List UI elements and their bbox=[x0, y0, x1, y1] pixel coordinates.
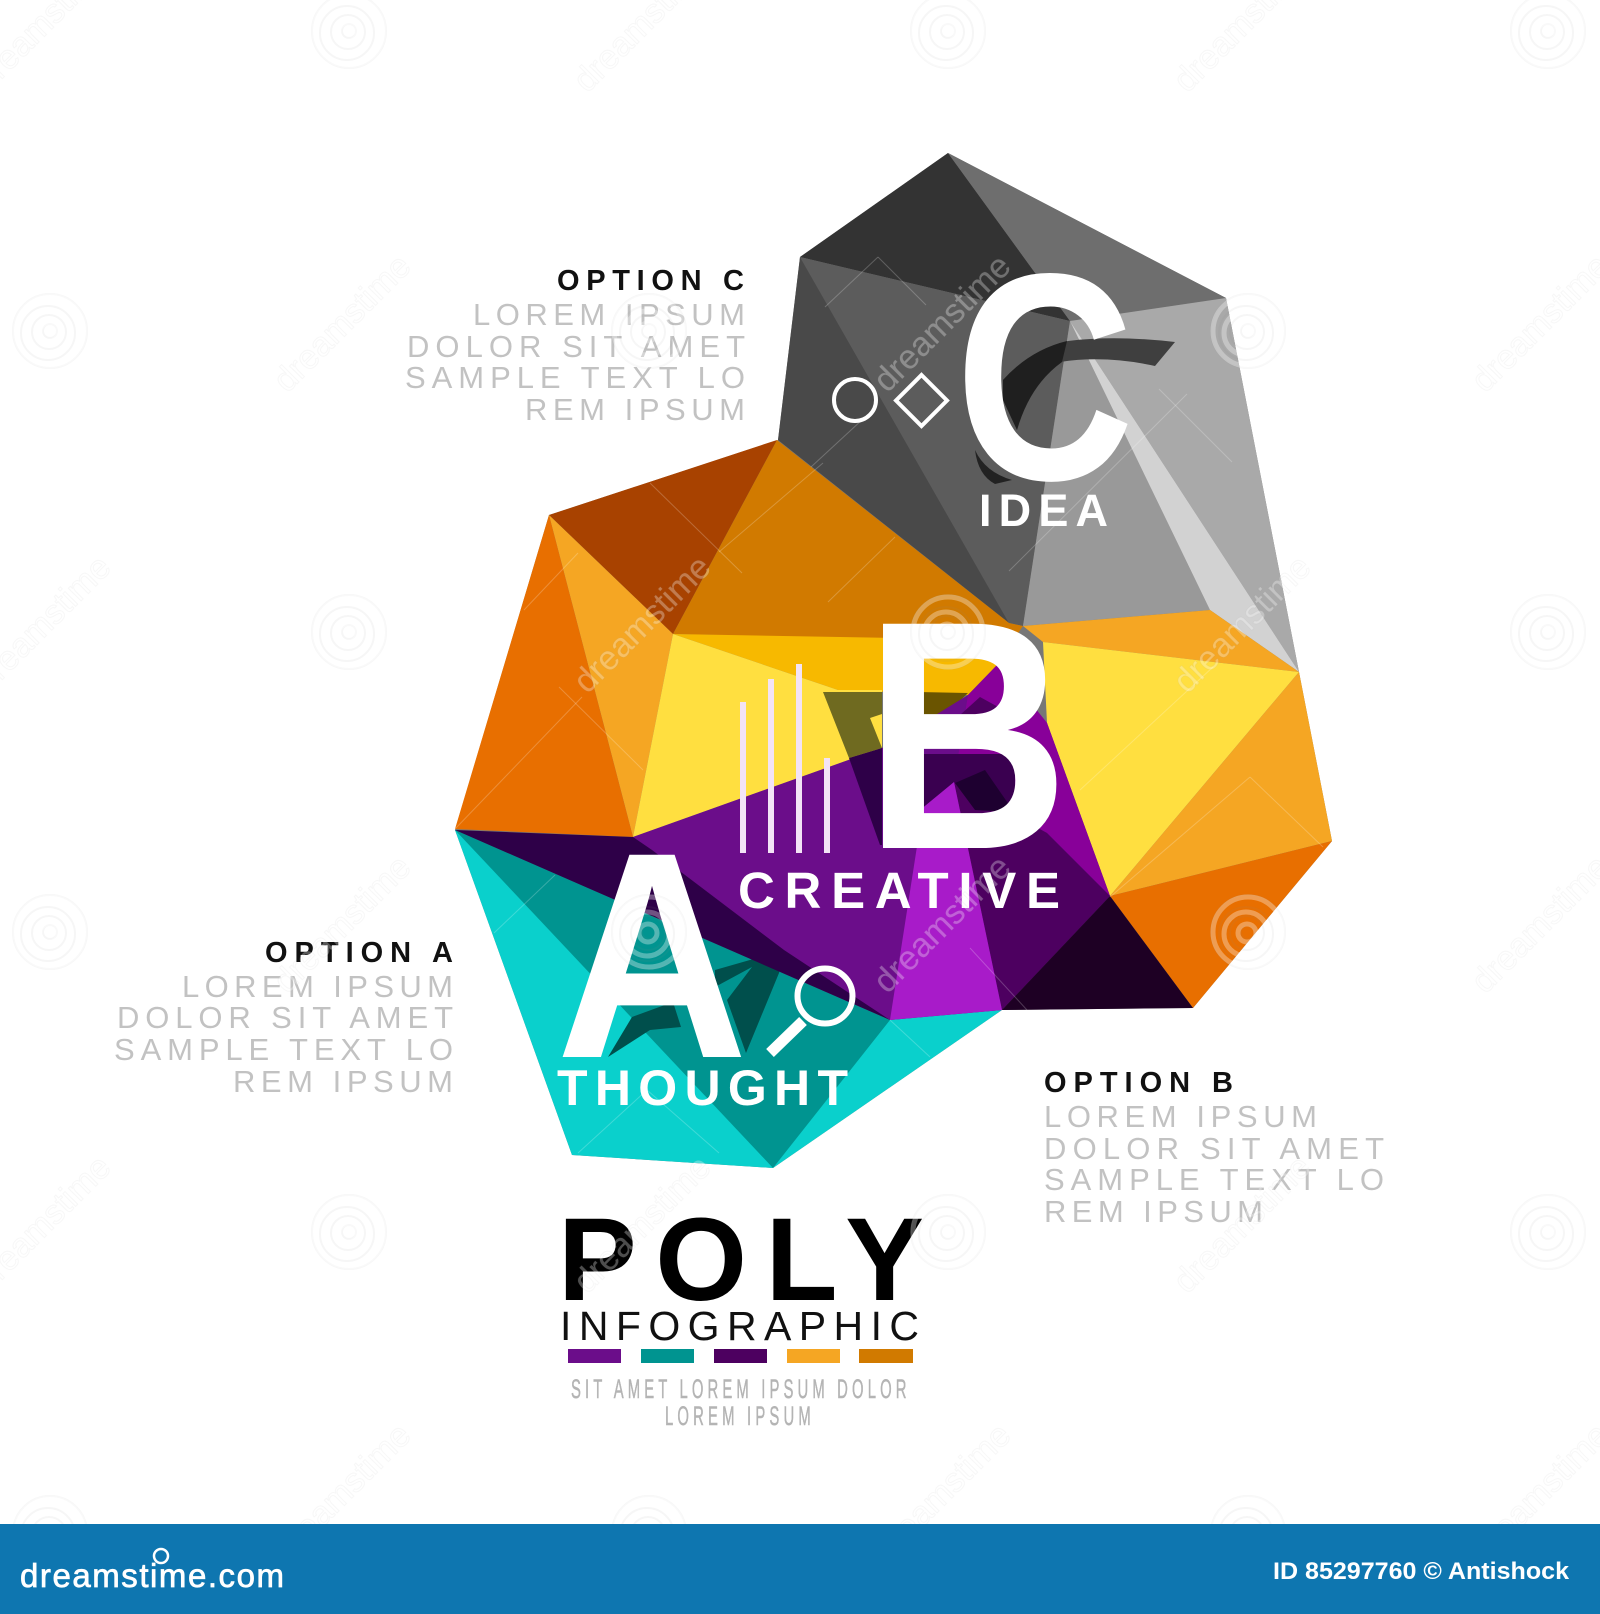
polygon: purple section bbox=[455, 663, 1193, 1020]
letter C: C bbox=[955, 212, 1134, 542]
icon: diamond bbox=[896, 375, 947, 426]
watermark pattern: dreamstime bbox=[566, 548, 718, 700]
icon: magnifier bbox=[770, 968, 852, 1053]
caption: LOREM IPSUM bbox=[665, 1400, 811, 1431]
footer logo: dreamstime.com bbox=[20, 1557, 284, 1594]
footer credit: ID 85297760 © Antishock bbox=[1273, 1558, 1570, 1585]
watermark pattern: dreamstime bbox=[266, 848, 418, 1000]
text block: option B: LOREM IPSUM bbox=[1044, 1099, 1317, 1134]
watermark pattern: dreamstime bbox=[1166, 548, 1318, 700]
text block: option A: REM IPSUM bbox=[233, 1064, 453, 1099]
caption bbox=[571, 1373, 906, 1431]
label: THOUGHT: THOUGHT bbox=[557, 1060, 848, 1116]
caption: SIT AMET LOREM IPSUM DOLOR bbox=[571, 1373, 906, 1404]
watermark pattern: dreamstime bbox=[866, 848, 1018, 1000]
text block: option B: OPTION B bbox=[1044, 1067, 1233, 1099]
text block: option C bbox=[405, 265, 745, 427]
label: CREATIVE: CREATIVE bbox=[738, 862, 1060, 919]
text block: option B: DOLOR SIT AMET bbox=[1044, 1131, 1384, 1166]
watermark pattern: dreamstime bbox=[266, 247, 418, 399]
letter A: A bbox=[556, 792, 748, 1120]
text block: option A: DOLOR SIT AMET bbox=[117, 1000, 453, 1035]
text block: option A: SAMPLE TEXT LO bbox=[114, 1032, 453, 1067]
colour bars bbox=[568, 1349, 913, 1363]
watermark pattern: dreamstime bbox=[866, 247, 1018, 399]
text block: option C: LOREM IPSUM bbox=[473, 297, 745, 332]
subtitle: INFOGRAPHIC: INFOGRAPHIC bbox=[560, 1303, 919, 1349]
polygon: gray section C bbox=[778, 153, 1299, 672]
watermark pattern: dreamstime bbox=[266, 1416, 418, 1568]
text block: option C: REM IPSUM bbox=[525, 392, 745, 427]
label: IDEA: IDEA bbox=[979, 485, 1108, 536]
title: POLY: POLY bbox=[558, 1194, 924, 1326]
text block: option B bbox=[1044, 1067, 1384, 1229]
watermark pattern: dreamstime bbox=[566, 1148, 718, 1300]
polygon: orange section B bbox=[455, 440, 1332, 1008]
watermark pattern: dreamstime bbox=[1166, 1148, 1318, 1300]
backing silhouette bbox=[455, 153, 1332, 1168]
watermark cross lines bbox=[455, 257, 1323, 1153]
watermark pattern: dreamstime bbox=[866, 1416, 1018, 1568]
letter B: B bbox=[864, 553, 1069, 917]
icon: circle bbox=[834, 379, 876, 421]
text block: option B: REM IPSUM bbox=[1044, 1194, 1263, 1229]
text block: option A: LOREM IPSUM bbox=[182, 969, 453, 1004]
text block: option A bbox=[114, 937, 453, 1099]
text block: option B: SAMPLE TEXT LO bbox=[1044, 1162, 1384, 1197]
icon: vertical bars bbox=[740, 664, 830, 853]
footer bar bbox=[0, 1524, 1600, 1614]
text block: option C: OPTION C bbox=[557, 265, 744, 297]
text block: option A: OPTION A bbox=[265, 937, 453, 969]
text block: option C: DOLOR SIT AMET bbox=[407, 329, 745, 364]
text block: option C: SAMPLE TEXT LO bbox=[405, 360, 745, 395]
polygon: teal section A bbox=[455, 830, 1002, 1168]
